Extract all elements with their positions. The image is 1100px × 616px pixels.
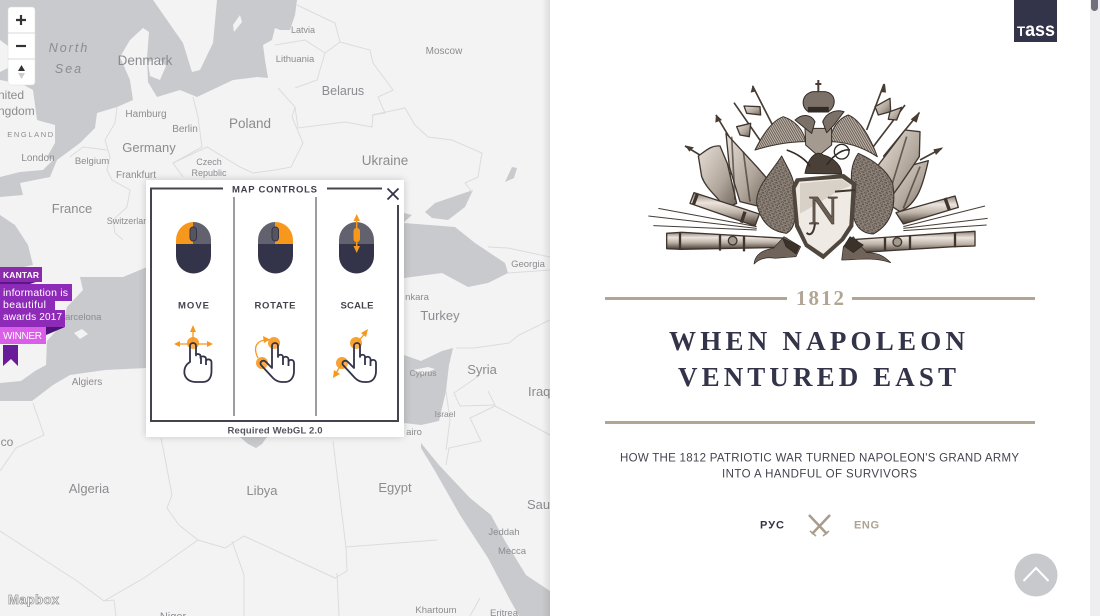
map labels: Saudi <box>527 497 560 512</box>
title <box>669 326 966 392</box>
language: russian: РУС <box>760 520 784 532</box>
map labels: Switzerland <box>107 216 153 226</box>
button: scroll up <box>1014 554 1058 596</box>
map labels: Syria <box>467 362 498 377</box>
icon: crossed swords <box>809 515 830 536</box>
map labels: Khartoum <box>415 605 457 616</box>
map labels: London <box>21 153 55 164</box>
laurel wreaths <box>757 153 894 234</box>
scrollbar <box>1090 0 1100 616</box>
map labels: Frankfurt <box>116 170 156 181</box>
title: VENTURED EAST <box>678 362 956 392</box>
heading: map controls: MAP CONTROLS <box>232 184 317 196</box>
label: rotate: ROTATE <box>254 300 296 312</box>
ribbons <box>754 237 891 264</box>
crown and cross <box>803 80 834 112</box>
map labels: co <box>1 435 14 449</box>
map labels: Mecca <box>498 546 527 557</box>
award badge: information is <box>3 287 68 299</box>
lower cannons <box>667 231 975 253</box>
subtitle: HOW THE 1812 PATRIOTIC WAR TURNED NAPOLEON'S GRAND ARMY <box>620 452 1019 464</box>
subtitle: INTO A HANDFUL OF SURVIVORS <box>722 468 917 480</box>
icon: mouse scroll wheel <box>339 214 374 274</box>
label: move: MOVE <box>178 300 209 312</box>
award badge: awards 2017 <box>3 312 62 323</box>
map labels: Ukraine <box>362 153 408 168</box>
map labels: Poland <box>229 116 271 131</box>
illustration: imperial eagle and arms emblem <box>648 80 988 264</box>
map labels: Israel <box>435 409 455 419</box>
icon: zoom in <box>16 15 26 25</box>
map labels: Czech <box>196 157 222 167</box>
map labels: Libya <box>246 483 278 498</box>
panel: title panel background <box>550 0 1090 616</box>
map labels: Belgium <box>75 156 109 167</box>
award badge: WINNER <box>3 331 42 342</box>
award badge: KANTAR <box>3 270 39 280</box>
map labels: Georgia <box>511 259 546 270</box>
icon: rotate gesture <box>256 336 294 382</box>
map labels: Barcelona <box>59 312 102 323</box>
icon: close <box>388 188 398 200</box>
award badge: beautiful <box>3 299 46 311</box>
upper cannons <box>690 193 958 226</box>
map labels: nkara <box>405 292 430 303</box>
map labels: Algeria <box>69 481 110 496</box>
icon: mouse left button <box>176 222 211 274</box>
icon: move gesture <box>174 325 213 382</box>
icon: scale gesture <box>333 329 376 382</box>
shield <box>792 174 857 259</box>
map labels: Turkey <box>420 308 460 323</box>
award badge <box>0 267 72 366</box>
map zoom controls <box>8 7 35 85</box>
map labels: Hamburg <box>125 109 167 120</box>
map labels: Cyprus <box>410 368 436 378</box>
map labels: Germany <box>122 140 176 155</box>
icon: zoom out <box>16 45 26 47</box>
shield: N <box>808 188 838 234</box>
map background <box>0 0 560 616</box>
map labels <box>0 25 560 616</box>
map labels: Latvia <box>291 25 315 35</box>
map labels: Sea <box>55 62 83 76</box>
flags <box>698 98 928 212</box>
map labels: airo <box>406 427 422 438</box>
eagle wings <box>755 115 877 157</box>
map labels: Belarus <box>322 84 364 98</box>
map labels: ENGLAND <box>7 130 55 139</box>
map labels: Lithuania <box>276 54 315 65</box>
map labels: Moscow <box>426 46 463 57</box>
language: english: ENG <box>854 520 879 532</box>
subtitle <box>620 452 1019 480</box>
map labels: France <box>52 201 92 216</box>
icon: mouse right button <box>258 222 293 274</box>
title: WHEN NAPOLEON <box>669 326 966 356</box>
map labels: Republic <box>191 168 227 178</box>
eagle body and talons <box>787 111 850 174</box>
logo: TASS <box>1014 0 1057 42</box>
rule with date: 1812: 1812 <box>796 286 844 310</box>
text: Mapbox logo: Mapbox <box>8 592 60 607</box>
logo: TASS: Tass <box>1017 20 1055 41</box>
map labels: Iraq <box>528 384 550 399</box>
map labels: Jeddah <box>488 527 520 538</box>
map labels: Egypt <box>378 480 412 495</box>
map labels: North <box>49 41 89 55</box>
map labels: Denmark <box>118 53 173 68</box>
map labels: Berlin <box>172 124 198 135</box>
text: webgl requirement: Required WebGL 2.0 <box>228 426 322 436</box>
label: scale: SCALE <box>340 300 374 312</box>
map labels: Algiers <box>72 377 102 388</box>
icon: compass <box>18 65 25 79</box>
spears and pikes <box>648 83 988 231</box>
panel: map controls popup <box>146 180 404 437</box>
